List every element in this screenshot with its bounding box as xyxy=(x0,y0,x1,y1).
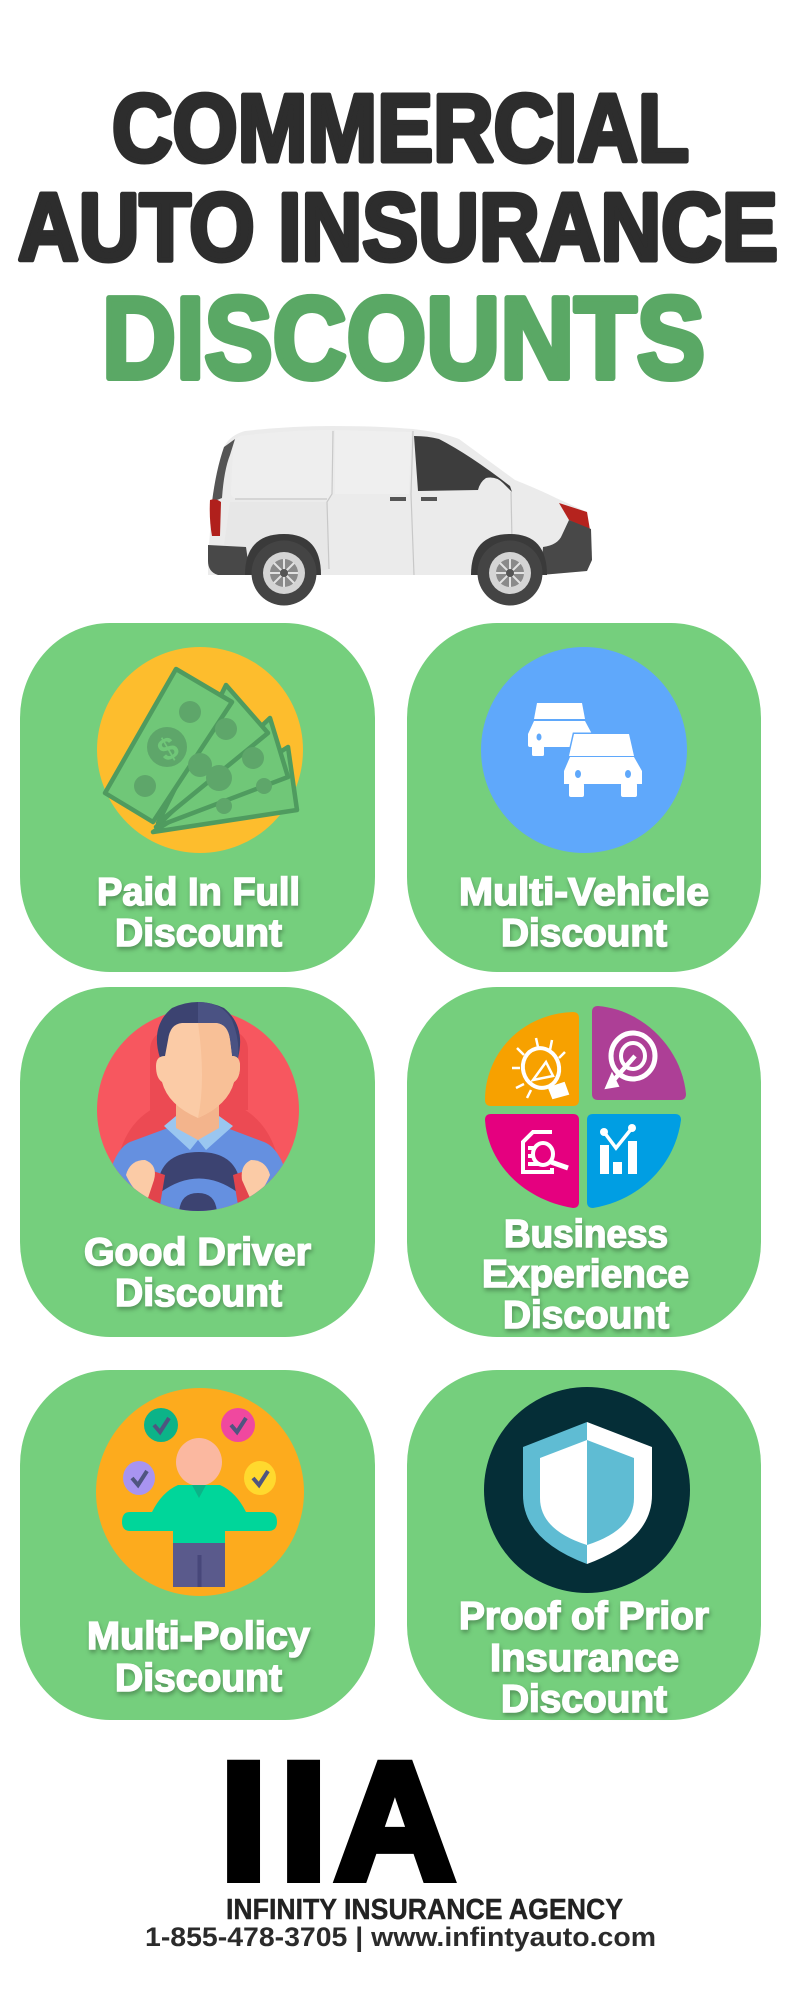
contact line: 1-855-478-3705 | www.infintyauto.com xyxy=(145,1922,656,1952)
panel: multi-vehicle discount xyxy=(407,623,761,972)
label: Insurance xyxy=(490,1637,679,1680)
icon: shield xyxy=(484,1387,690,1593)
panel: paid in full discount xyxy=(20,623,375,972)
label: Multi-Vehicle xyxy=(459,871,709,914)
label: Discount xyxy=(115,1272,282,1315)
illustration: white cargo van xyxy=(208,426,592,606)
label: Discount xyxy=(501,1678,667,1721)
icon: person juggling policies xyxy=(96,1388,304,1596)
label: Multi-Policy xyxy=(87,1615,310,1658)
label: Discount xyxy=(503,1294,669,1337)
icon: fan of dollar bills xyxy=(97,647,303,853)
panel: business experience discount xyxy=(407,987,761,1337)
title xyxy=(18,75,778,403)
icon: two white cars xyxy=(481,647,687,853)
icon: fan of dollar bills: $ xyxy=(151,729,185,769)
label: Discount xyxy=(115,1657,282,1700)
agency name: INFINITY INSURANCE AGENCY xyxy=(226,1894,623,1926)
title: DISCOUNTS xyxy=(102,273,705,403)
icon: four coloured quadrants xyxy=(485,1006,686,1208)
panel: proof of prior insurance discount xyxy=(407,1370,761,1721)
label: Discount xyxy=(501,912,667,955)
title: COMMERCIAL xyxy=(112,75,689,182)
icon: driver at steering wheel xyxy=(97,1002,299,1215)
panel: good driver discount xyxy=(20,987,375,1337)
label: Discount xyxy=(115,912,282,955)
label: Paid In Full xyxy=(97,871,300,914)
label: Good Driver xyxy=(84,1231,311,1274)
label: Proof of Prior xyxy=(459,1595,709,1638)
logo: IIA wordmark: IIA xyxy=(220,1730,455,1914)
label: Business xyxy=(504,1213,668,1256)
panel: multi-policy discount xyxy=(20,1370,375,1720)
label: Experience xyxy=(482,1253,689,1296)
